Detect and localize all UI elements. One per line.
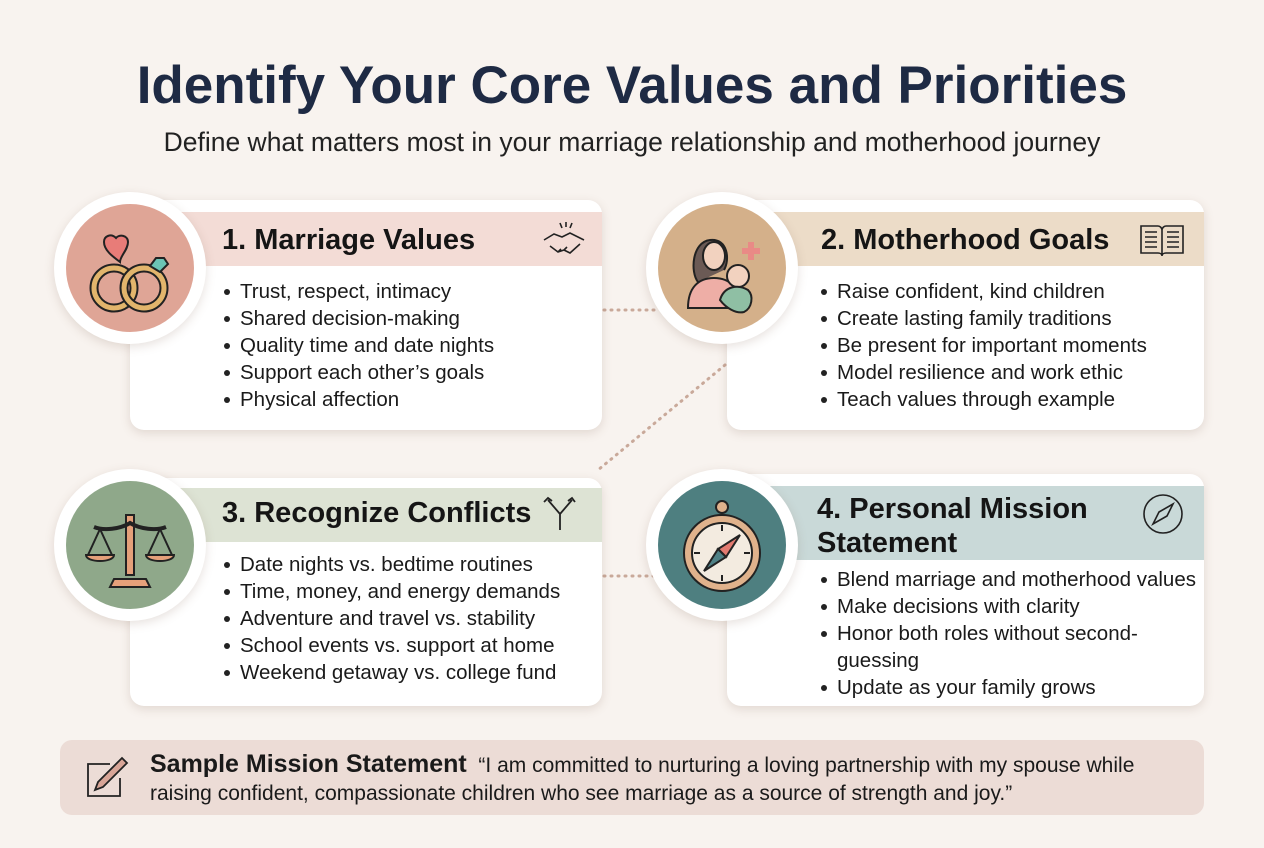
heading: 2. Motherhood Goals bbox=[821, 224, 1109, 256]
panel: marriage values: Trust, respect, intimacy bbox=[240, 280, 451, 303]
panel: personal mission statement: Honor both roles without second- bbox=[837, 622, 1138, 645]
panel: marriage values: Quality time and date nights bbox=[240, 334, 494, 357]
panel: recognize conflicts bbox=[130, 478, 602, 706]
heading: 1. Marriage Values bbox=[222, 224, 475, 256]
heading bbox=[817, 493, 1088, 559]
panel: marriage values: Support each other’s goals bbox=[240, 361, 484, 384]
icon: compass bbox=[646, 469, 798, 621]
panel: marriage values: Shared decision-making bbox=[240, 307, 460, 330]
panel: recognize conflicts: Adventure and travel vs. stability bbox=[240, 607, 535, 630]
panel: marriage values bbox=[130, 200, 602, 430]
panel: motherhood goals: Teach values through example bbox=[837, 388, 1115, 411]
icon: handshake bbox=[544, 222, 584, 254]
icon: rings bbox=[54, 192, 206, 344]
callout: sample mission statement bbox=[60, 740, 1204, 815]
panel: motherhood goals: Be present for important moments bbox=[837, 334, 1147, 357]
panel: personal mission statement: Make decisions with clarity bbox=[837, 595, 1080, 618]
heading: Statement bbox=[817, 527, 957, 559]
panel: recognize conflicts: Time, money, and energy demands bbox=[240, 580, 560, 603]
panel: motherhood goals bbox=[727, 200, 1204, 430]
panel: personal mission statement: Blend marriage and motherhood values bbox=[837, 568, 1196, 591]
subtitle: Define what matters most in your marriage relationship and motherhood journey bbox=[164, 127, 1100, 157]
panel: recognize conflicts: Weekend getaway vs. college fund bbox=[240, 661, 556, 684]
panel: personal mission statement: guessing bbox=[837, 649, 919, 672]
panel: motherhood goals: Raise confident, kind children bbox=[837, 280, 1105, 303]
icon: book bbox=[1140, 225, 1184, 256]
panel: marriage values: Physical affection bbox=[240, 388, 399, 411]
heading: 3. Recognize Conflicts bbox=[222, 497, 531, 529]
panel: personal mission statement: Update as your family grows bbox=[837, 676, 1096, 699]
panel: recognize conflicts: Date nights vs. bedtime routines bbox=[240, 553, 533, 576]
icon: split arrow bbox=[543, 496, 576, 530]
title: Identify Your Core Values and Priorities bbox=[137, 56, 1127, 115]
panel: motherhood goals: Create lasting family traditions bbox=[837, 307, 1112, 330]
icon: scales bbox=[54, 469, 206, 621]
icon: mother and child bbox=[646, 192, 798, 344]
icon: compass small bbox=[1143, 494, 1183, 534]
panel: recognize conflicts: School events vs. support at home bbox=[240, 634, 555, 657]
heading: 4. Personal Mission bbox=[817, 493, 1088, 525]
panel: motherhood goals: Model resilience and work ethic bbox=[837, 361, 1123, 384]
callout: sample mission statement: Sample Mission Statement “I am committed to nurturing a loving partnership with my spouse while raising confident, compassionate children who see marriage as a source of strength and joy.” bbox=[150, 750, 1134, 805]
icon: pencil bbox=[87, 756, 128, 797]
panel: personal mission statement bbox=[727, 474, 1204, 706]
